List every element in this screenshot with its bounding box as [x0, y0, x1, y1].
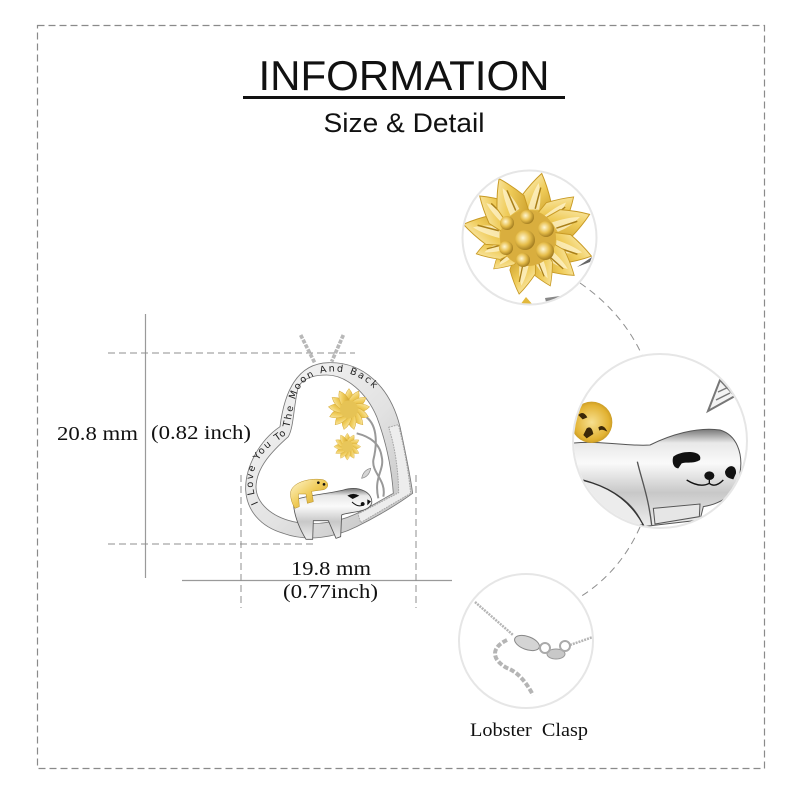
- necklace pendant: [245, 334, 414, 540]
- small sunflower: [334, 433, 361, 460]
- necklace pendant: I Love You To The Moon And Back: [247, 364, 378, 506]
- large sunflower: [328, 389, 370, 431]
- detail circle: lobster clasp: [459, 574, 593, 708]
- vines: [357, 417, 384, 498]
- chain: [475, 602, 593, 645]
- subtitle: Size & Detail: [324, 108, 484, 138]
- silver sloth: [293, 489, 372, 539]
- sloth body: [570, 429, 741, 527]
- height label inches: (0.82 inch): [151, 423, 251, 444]
- big sunflower petals: [460, 170, 596, 296]
- width label: 19.8 mm: [291, 559, 371, 580]
- width label inches: (0.77inch): [283, 582, 378, 603]
- clasp caption: Lobster Clasp: [470, 720, 588, 741]
- connector: sloth to clasp: [580, 527, 640, 597]
- detail circle: sloth: [570, 354, 747, 528]
- extender chain: [495, 640, 533, 695]
- crystal band: [358, 425, 411, 523]
- dimension guide lines: [108, 314, 452, 608]
- face: [673, 452, 700, 468]
- gold baby sloth: [291, 479, 328, 508]
- engraved text: [253, 371, 393, 503]
- leaf: [362, 468, 371, 478]
- chain: [301, 335, 343, 363]
- title underline: [243, 96, 565, 99]
- connector: sunflower to sloth: [580, 283, 642, 355]
- gold sloth head: [571, 402, 612, 443]
- clasp: [514, 634, 540, 652]
- title: INFORMATION: [258, 52, 550, 99]
- leaf fragment: [708, 380, 735, 411]
- height label: 20.8 mm: [57, 424, 138, 445]
- heart frame: [246, 363, 413, 538]
- detail circle: sunflower: [460, 170, 596, 305]
